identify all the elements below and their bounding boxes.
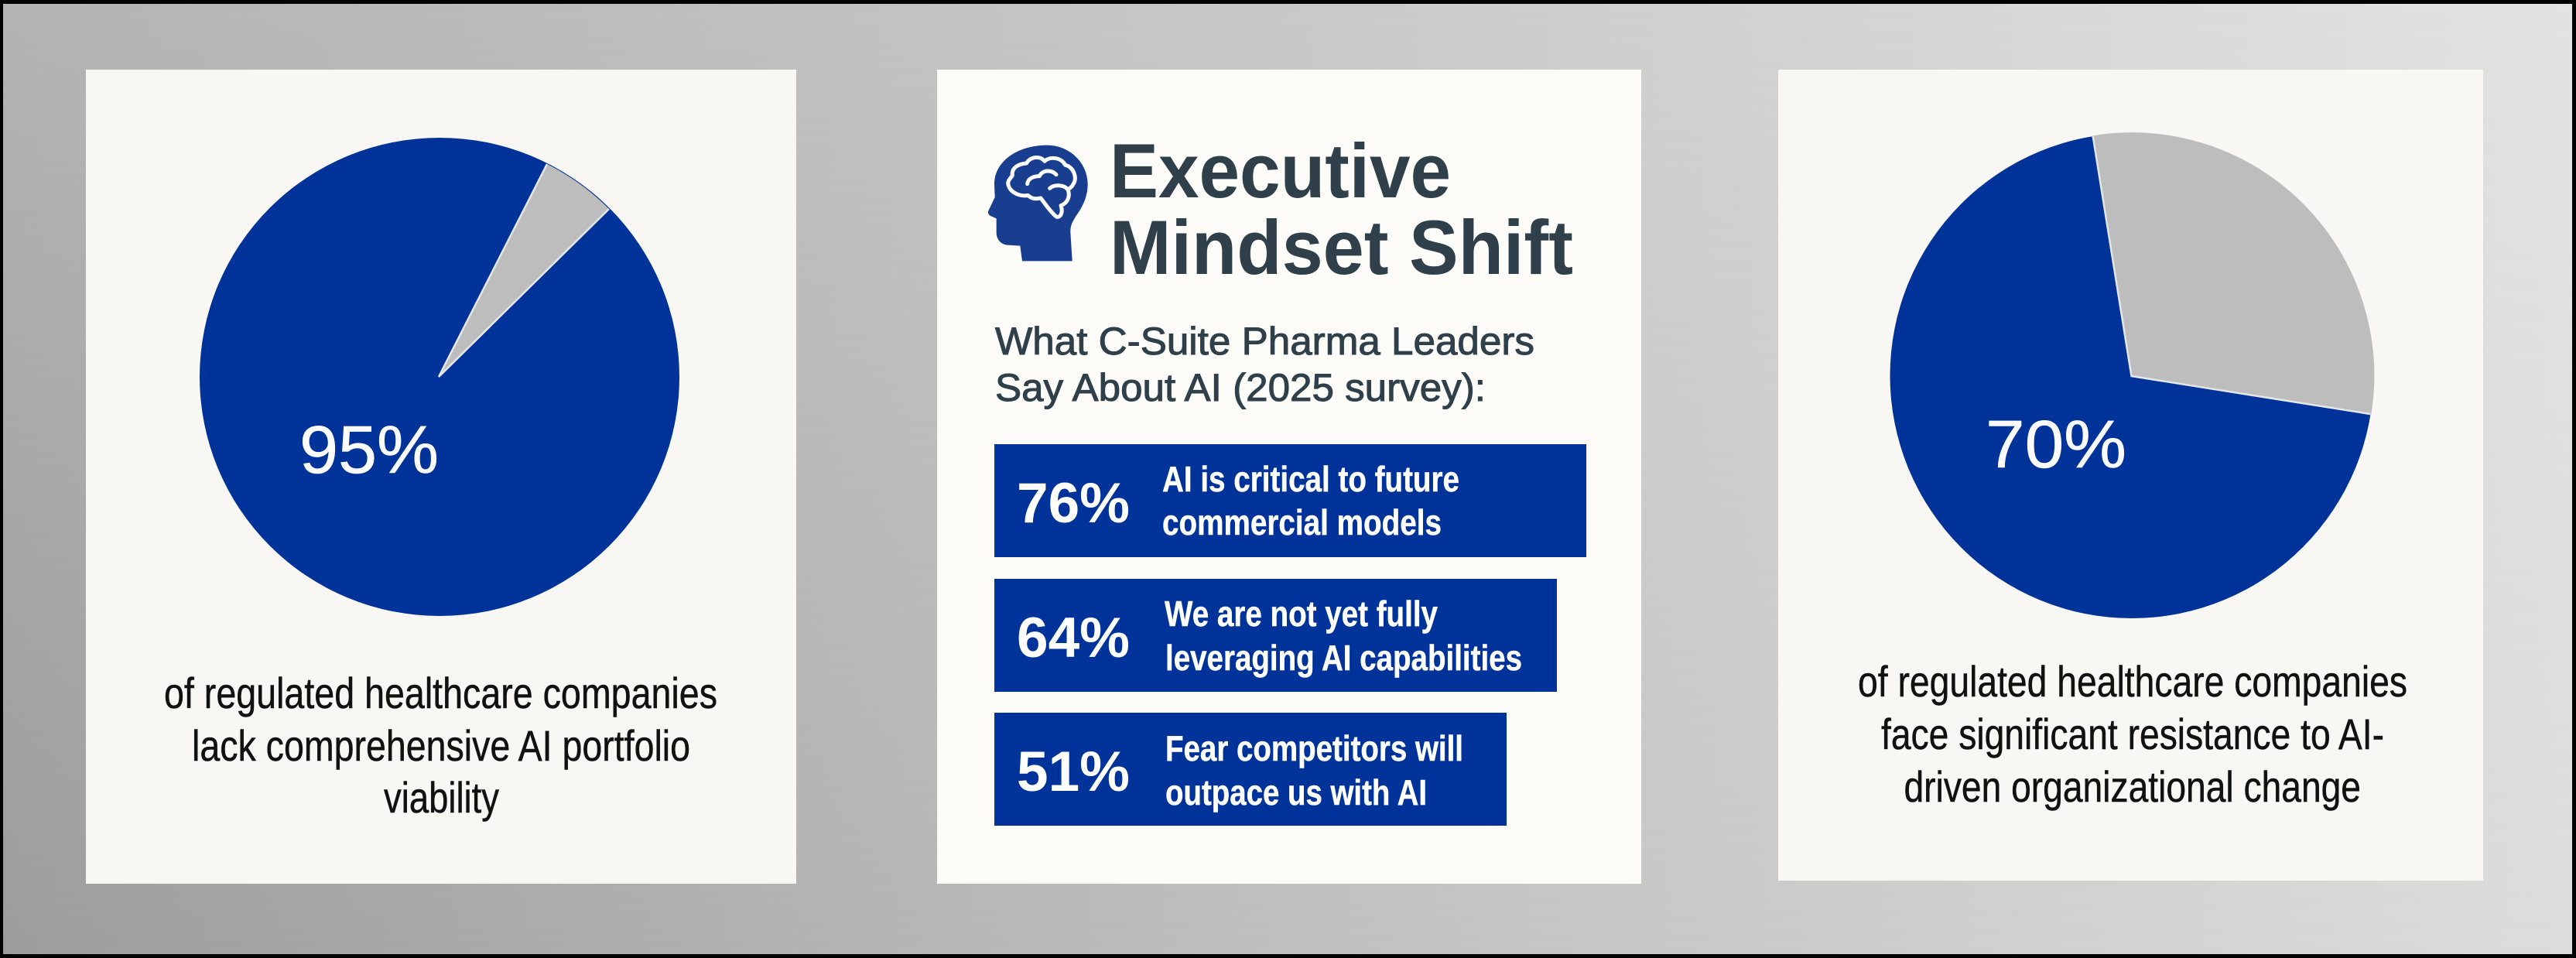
pie chart: 70%: 70% [1986,407,2126,482]
stat bar: 76% [994,444,1586,557]
pie chart: 95%: 95% [299,412,439,488]
panel: 95% portfolio viability [86,70,796,884]
stat bar: 64%: leveraging AI capabilities [1165,638,1522,678]
panel: 70% resistance to change [1778,70,2483,881]
caption: resistance to change: of regulated healthcare companies [1858,657,2407,706]
caption: resistance to change: face significant resistance to AI- [1881,710,2384,758]
stat bar: 76%: AI is critical to future [1162,459,1459,499]
stat bar: 51%: Fear competitors will [1165,728,1463,768]
icon: head with brain [988,145,1088,261]
stat bar: 76%: 76% [1017,472,1130,535]
stat bar: 64%: We are not yet fully [1165,594,1438,634]
title: Mindset Shift [1110,204,1573,290]
stat bar: 51%: outpace us with AI [1165,772,1427,813]
pie chart: 95% [200,138,679,616]
subtitle: What C-Suite Pharma Leaders [995,320,1534,363]
stat bar: 76%: commercial models [1162,502,1442,542]
pie chart: 70% [1890,133,2374,618]
stat bar: 64% [994,579,1557,692]
panel: executive mindset shift [937,70,1641,884]
caption: portfolio viability: lack comprehensive AI portfolio [192,721,690,770]
title: Executive [1110,128,1451,214]
caption: portfolio viability: viability [384,773,499,822]
subtitle: Say About AI (2025 survey): [995,366,1486,409]
caption: resistance to change [1858,657,2407,811]
caption: portfolio viability [164,669,717,822]
subtitle [995,320,1534,409]
caption: resistance to change: driven organizational change [1904,762,2361,811]
stat bar: 64%: 64% [1017,607,1130,669]
stat bar: 51% [994,713,1507,826]
caption: portfolio viability: of regulated healthcare companies [164,669,717,717]
title [1110,128,1573,290]
stat bar: 51%: 51% [1017,741,1130,803]
